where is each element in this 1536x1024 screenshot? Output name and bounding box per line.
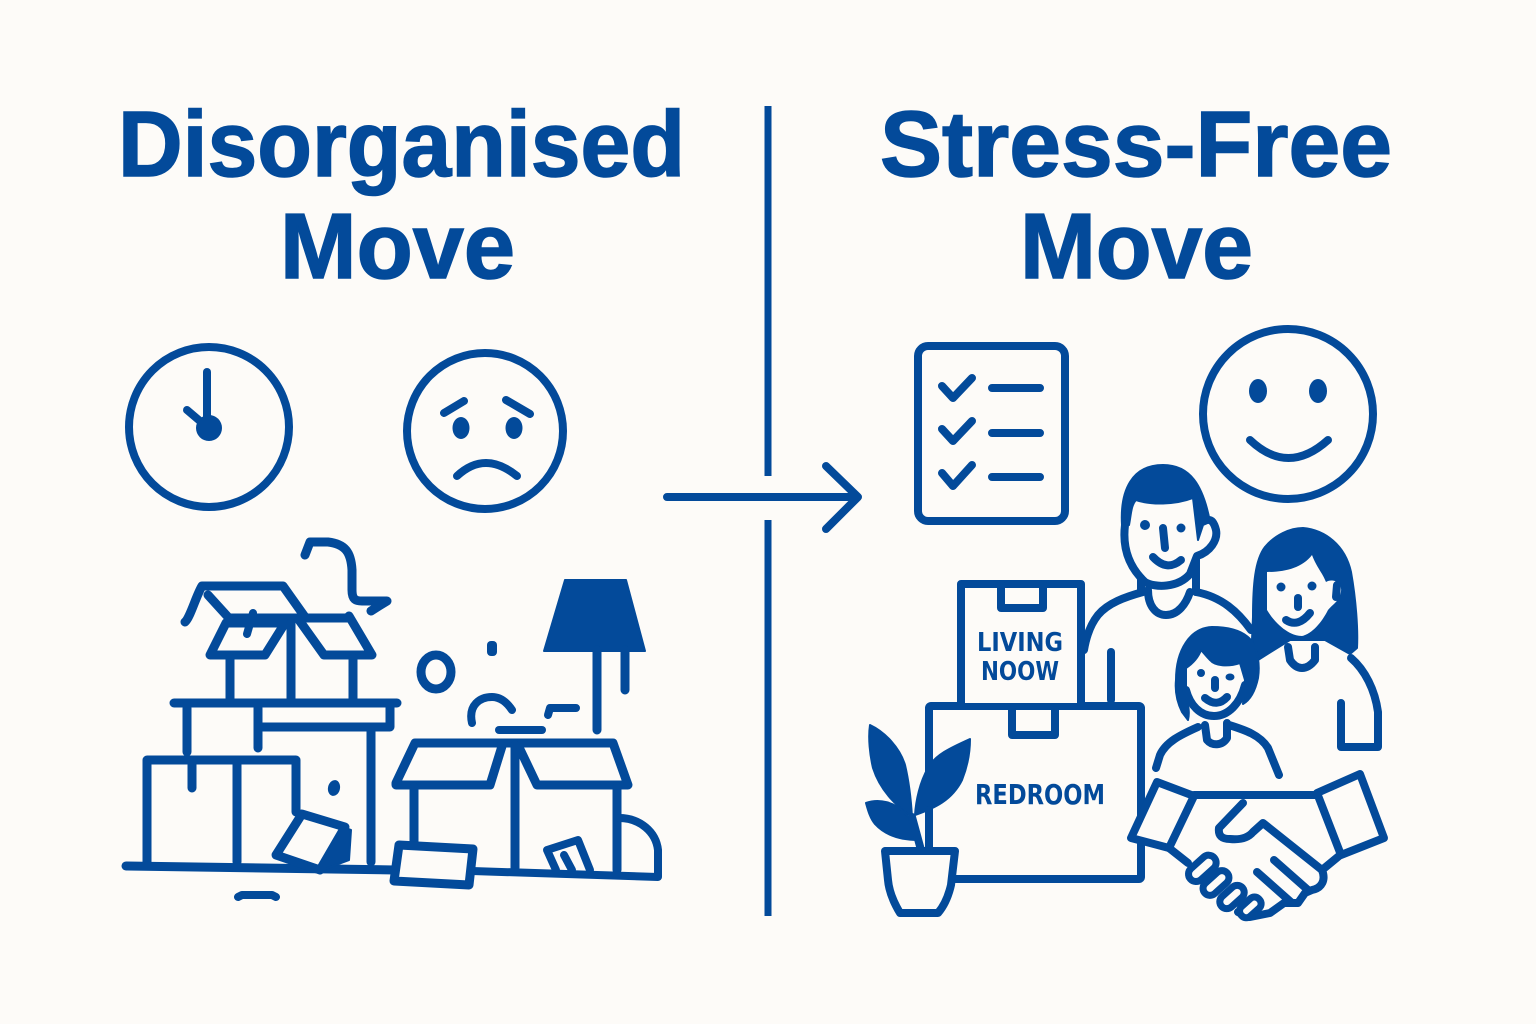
shelf and cabinet [174,703,397,862]
box: living room: NOOW [981,657,1059,687]
floor lamp [544,580,645,730]
icon: sad face [407,353,563,509]
child [1156,627,1279,775]
woman [1252,528,1378,747]
box: bedroom [929,706,1141,879]
man [1084,465,1251,700]
title: Disorganised Move: Move [280,194,515,298]
cabinet knob [326,779,342,797]
title: Disorganised Move [118,92,685,298]
icon: clock [129,347,289,507]
title: Stress-Free Move [880,92,1392,298]
icon: handshake [1131,774,1384,920]
flat tilted box [394,845,473,885]
title: Stress-Free Move: Move [1020,194,1253,298]
icon: checklist [918,346,1065,521]
right open box [396,743,658,877]
title: Disorganised Move: Disorganised [118,92,685,196]
top open box [185,586,372,700]
floating squiggle [305,542,387,611]
title: Stress-Free Move: Stress-Free [880,92,1392,196]
flying debris [238,641,576,897]
floor line [126,866,396,870]
plant in pot [866,725,970,913]
box: living room: LIVING [977,628,1063,658]
icon: smiling face [1203,329,1373,499]
arrow: from disorganised to stress-free [667,466,858,529]
box: living room [961,584,1081,703]
illustration: family of three [1084,465,1378,775]
tilted small box [276,814,351,870]
box: bedroom: REDROOM [975,778,1105,811]
illustration: pile of messy boxes [126,542,658,897]
lower left box [147,760,296,862]
vertical divider [764,106,772,916]
